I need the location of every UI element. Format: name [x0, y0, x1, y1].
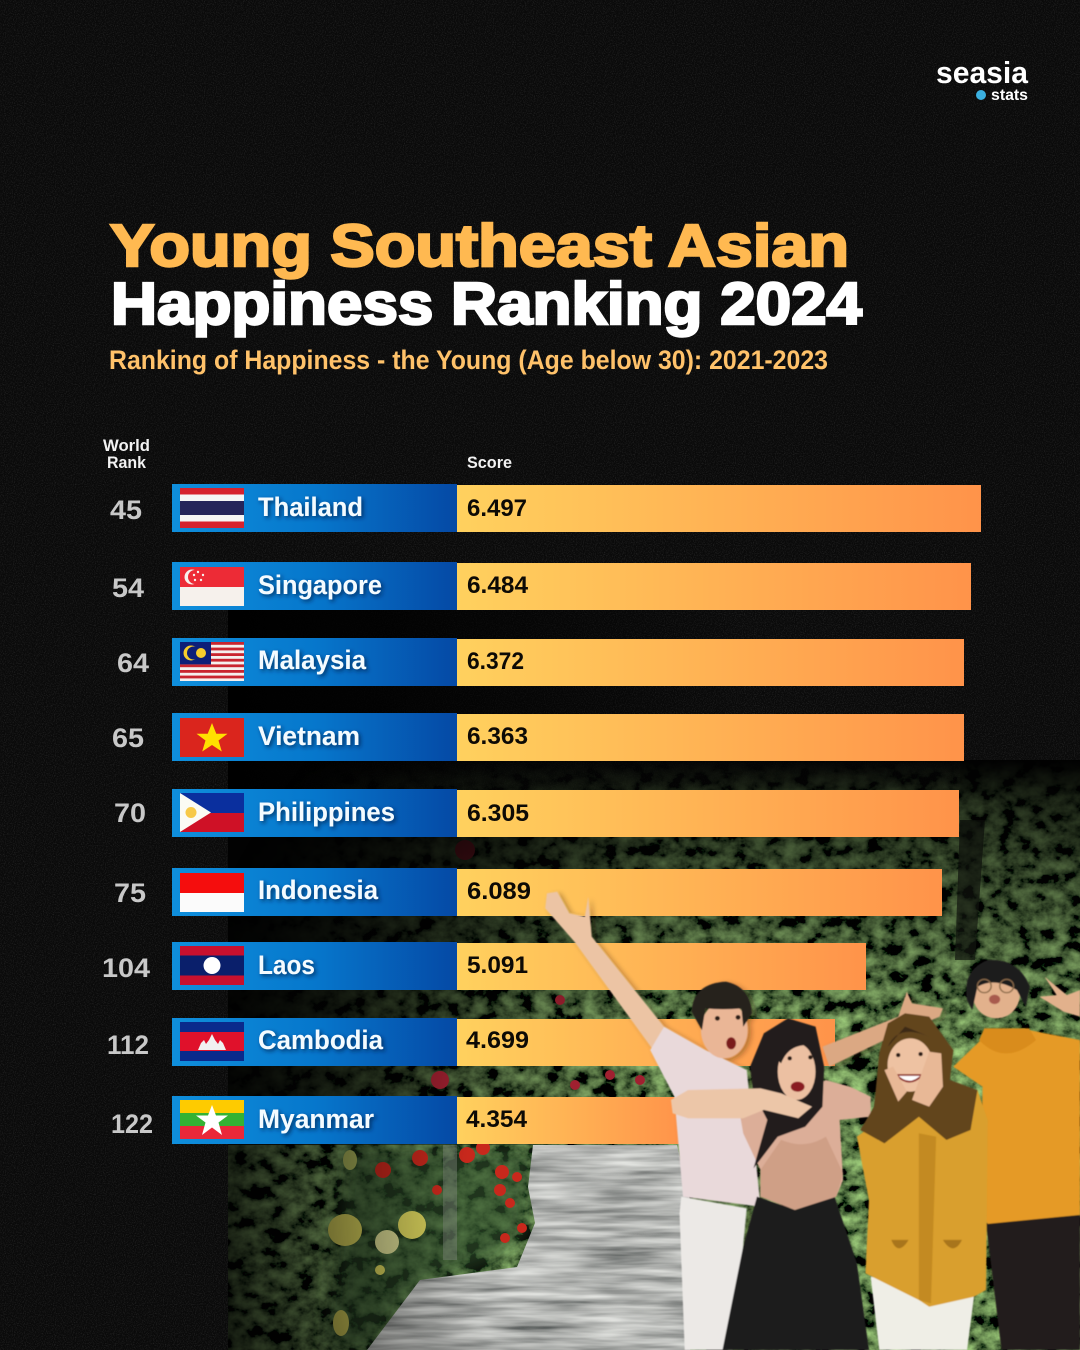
flag: Philippines	[180, 793, 244, 832]
row: Thailand: 45	[110, 495, 142, 525]
row: Laos: Laos	[258, 950, 315, 980]
logo: seasia stats: stats	[991, 87, 1028, 104]
row: Vietnam: 65	[112, 723, 144, 753]
flag: Singapore	[180, 567, 244, 606]
dim foliage behind bars on the left	[228, 837, 674, 1145]
row: Vietnam	[112, 713, 964, 761]
row: Indonesia: 75	[114, 878, 146, 908]
title	[110, 213, 862, 337]
row: Singapore: Singapore	[258, 570, 382, 600]
person: man in pale pink shirt	[545, 892, 943, 1350]
row: Myanmar: 122	[111, 1109, 153, 1139]
row: Myanmar	[111, 1096, 682, 1144]
row: Philippines: Philippines	[258, 797, 395, 827]
row: Vietnam: Vietnam	[258, 721, 360, 751]
flag: Thailand	[180, 488, 244, 528]
flag: Vietnam	[180, 718, 244, 757]
row: Laos	[102, 942, 866, 990]
row: Cambodia: 4.699	[466, 1027, 529, 1054]
row: Thailand	[110, 484, 981, 532]
row: Philippines	[114, 789, 959, 837]
photo: four young people	[545, 892, 1080, 1350]
title: Happiness Ranking 2024	[111, 271, 862, 337]
row: Malaysia: 6.372	[467, 648, 524, 675]
row: Philippines: 70	[114, 798, 146, 828]
row: Singapore	[112, 562, 971, 610]
row: Laos: 5.091	[467, 952, 528, 979]
person: woman with long hair and black skirt	[671, 1018, 871, 1350]
column header: world rank: World	[103, 436, 150, 455]
row: Laos: 104	[102, 953, 150, 983]
row: Singapore: 54	[112, 573, 144, 603]
row: Myanmar: Myanmar	[258, 1104, 374, 1134]
garden photo background	[228, 760, 1080, 1350]
subtitle: Ranking of Happiness - the Young (Age below 30): 2021-2023	[109, 345, 828, 375]
flag: Cambodia	[180, 1022, 244, 1061]
row: Malaysia: Malaysia	[258, 645, 367, 675]
row: Thailand: 6.497	[467, 495, 527, 522]
garden walkway	[367, 1145, 690, 1350]
person: man in orange sweater	[953, 960, 1080, 1350]
row: Cambodia: 112	[107, 1030, 149, 1060]
row: Thailand: Thailand	[258, 492, 363, 522]
foliage flowers in upper garden	[431, 840, 645, 1090]
column header: world rank: Rank	[107, 453, 147, 472]
flag: Indonesia	[180, 873, 244, 912]
row: Myanmar: 4.354	[466, 1106, 528, 1133]
row: Malaysia	[117, 638, 964, 686]
flag: Laos	[180, 946, 244, 985]
row: Indonesia	[114, 868, 942, 916]
dark tree trunk at right	[955, 820, 985, 960]
logo dot	[976, 90, 986, 100]
title: Young Southeast Asian	[110, 213, 849, 279]
flag: Malaysia	[180, 642, 244, 681]
row: Indonesia: Indonesia	[258, 875, 379, 905]
row: Malaysia: 64	[117, 648, 149, 678]
row: Vietnam: 6.363	[467, 723, 528, 750]
column header: world rank	[103, 436, 150, 472]
row: Indonesia: 6.089	[467, 878, 531, 905]
person: woman in hijab and mustard cardigan	[857, 1013, 988, 1350]
garden flower bed	[328, 1141, 549, 1350]
row: Cambodia: Cambodia	[258, 1025, 384, 1055]
row: Philippines: 6.305	[467, 800, 529, 827]
column header: score: Score	[467, 453, 512, 472]
flag: Myanmar	[180, 1100, 244, 1139]
top shading of photo	[315, 760, 1080, 1032]
row: Singapore: 6.484	[467, 572, 529, 599]
row: Cambodia	[107, 1018, 835, 1066]
logo: seasia stats: seasia	[936, 55, 1029, 90]
